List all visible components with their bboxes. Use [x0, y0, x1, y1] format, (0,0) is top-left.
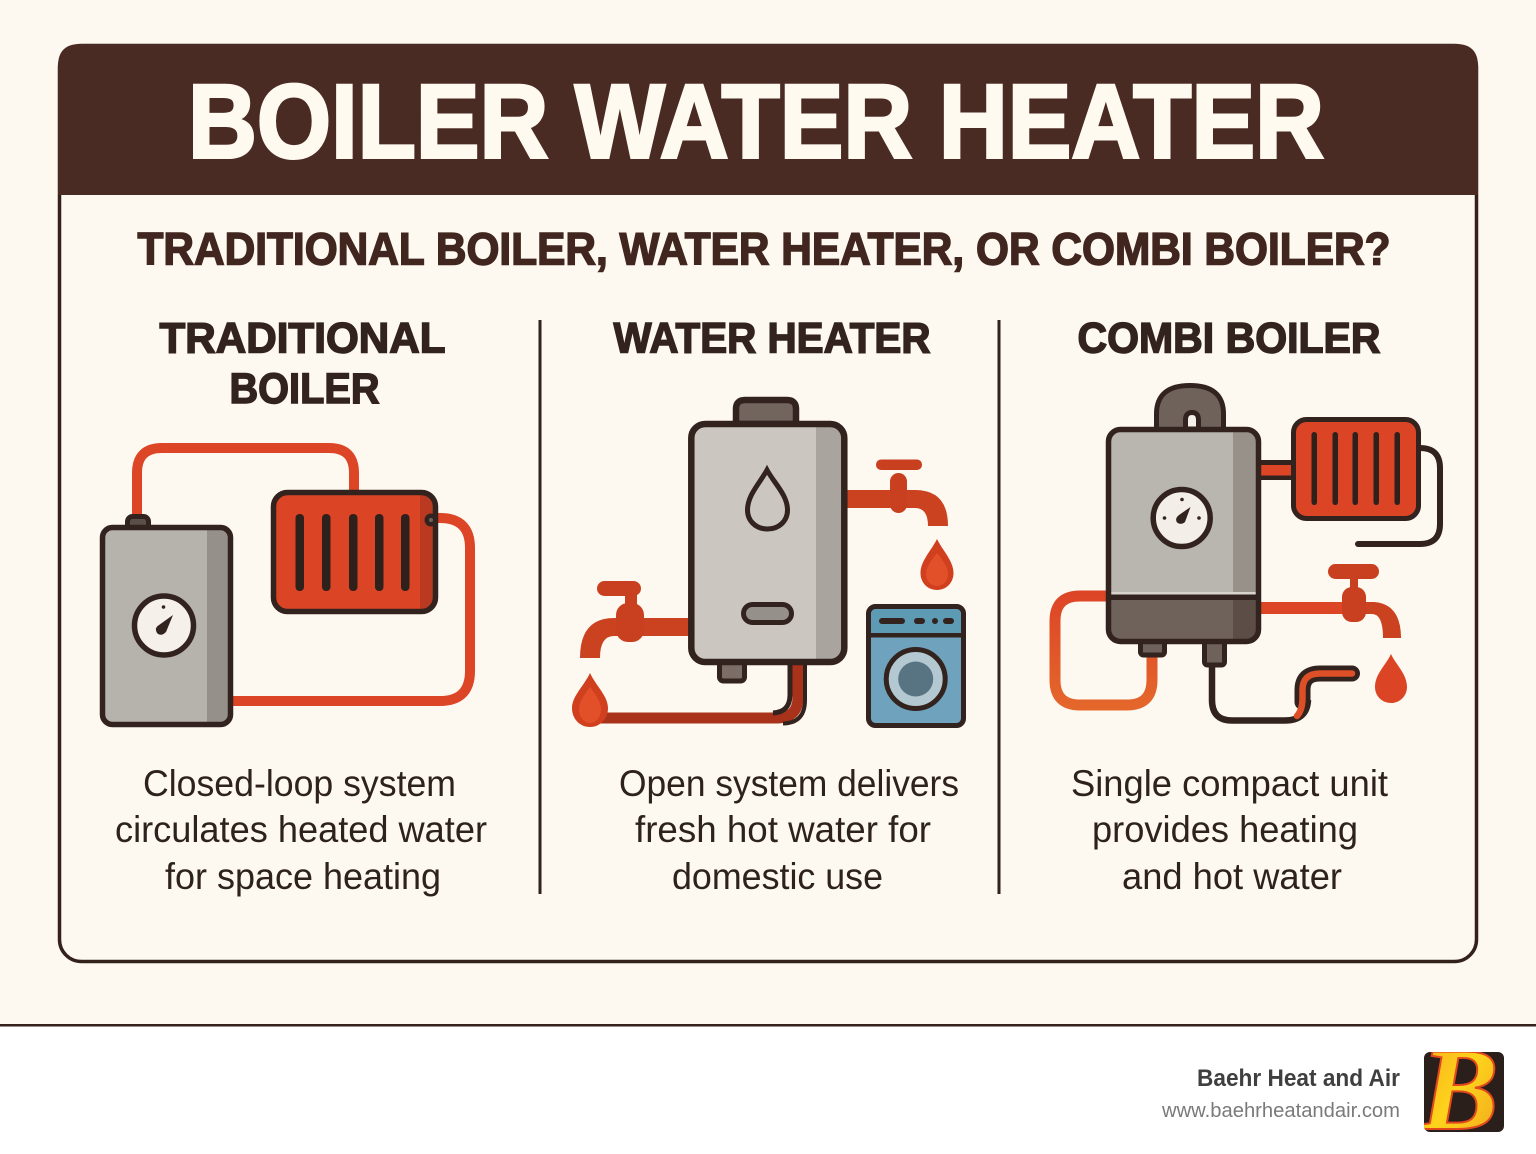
- left drop: [572, 673, 608, 727]
- logo: [1424, 1052, 1504, 1132]
- text: water heater description: fresh hot water for: [635, 809, 931, 850]
- subtitle: TRADITIONAL BOILER, WATER HEATER, OR COMBI BOILER?: [138, 224, 1390, 275]
- slot: [744, 604, 792, 622]
- heading: combi boiler: COMBI BOILER: [1078, 315, 1380, 363]
- text: traditional boiler description: [115, 763, 487, 897]
- faucet: [1350, 602, 1401, 638]
- icon: water heater with faucets and washer: [572, 400, 964, 727]
- left faucet: [580, 618, 690, 658]
- faucet pipe: [1258, 602, 1348, 614]
- tank body: [691, 424, 844, 662]
- drain pipe: [1212, 665, 1308, 720]
- header band: [58, 44, 1478, 195]
- footer: [0, 1024, 1536, 1154]
- right faucet: [845, 490, 948, 526]
- hanger: [1156, 386, 1224, 432]
- website: www.baehrheatandair.com: [1161, 1100, 1400, 1122]
- text: combi boiler description: and hot water: [1122, 856, 1342, 897]
- text: combi boiler description: Single compact unit: [1071, 763, 1389, 804]
- text: water heater description: [619, 763, 959, 897]
- text: traditional boiler description: Closed-loop system: [143, 763, 456, 804]
- text: water heater description: Open system delivers: [619, 763, 959, 804]
- column dividers: [538, 320, 1000, 894]
- top cap: [736, 400, 796, 424]
- text: combi boiler description: [1071, 763, 1389, 897]
- text: traditional boiler description: for space heating: [165, 856, 441, 897]
- heading: traditional boiler: [160, 315, 446, 413]
- pipe to left drop: [600, 662, 798, 718]
- drop: [1375, 654, 1407, 703]
- radiator return wire: [1358, 448, 1440, 544]
- text: water heater description: domestic use: [672, 856, 883, 897]
- washer: [868, 606, 964, 726]
- nubs: [1140, 638, 1164, 655]
- heating loop: [1055, 596, 1152, 705]
- drop symbol: [748, 470, 788, 529]
- title: BOILER WATER HEATER: [188, 64, 1324, 180]
- bottom nub: [720, 660, 744, 681]
- company name: Baehr Heat and Air: [1197, 1065, 1400, 1092]
- heading: traditional boiler: TRADITIONAL: [160, 315, 446, 363]
- boiler body: [1108, 430, 1258, 642]
- right drop: [920, 539, 954, 590]
- icon: traditional boiler with radiator loop: [102, 448, 470, 724]
- logo: B: [1418, 1024, 1499, 1154]
- heading: traditional boiler: BOILER: [230, 365, 380, 413]
- text: combi boiler description: provides heating: [1092, 809, 1358, 850]
- text: traditional boiler description: circulates heated water: [115, 809, 487, 850]
- panel: main card: [58, 44, 1478, 962]
- radiator: [1294, 420, 1418, 518]
- gauge: [1153, 490, 1210, 546]
- radiator link: [1258, 460, 1294, 480]
- heading: water heater: WATER HEATER: [614, 315, 930, 363]
- icon: combi boiler: [1055, 386, 1440, 720]
